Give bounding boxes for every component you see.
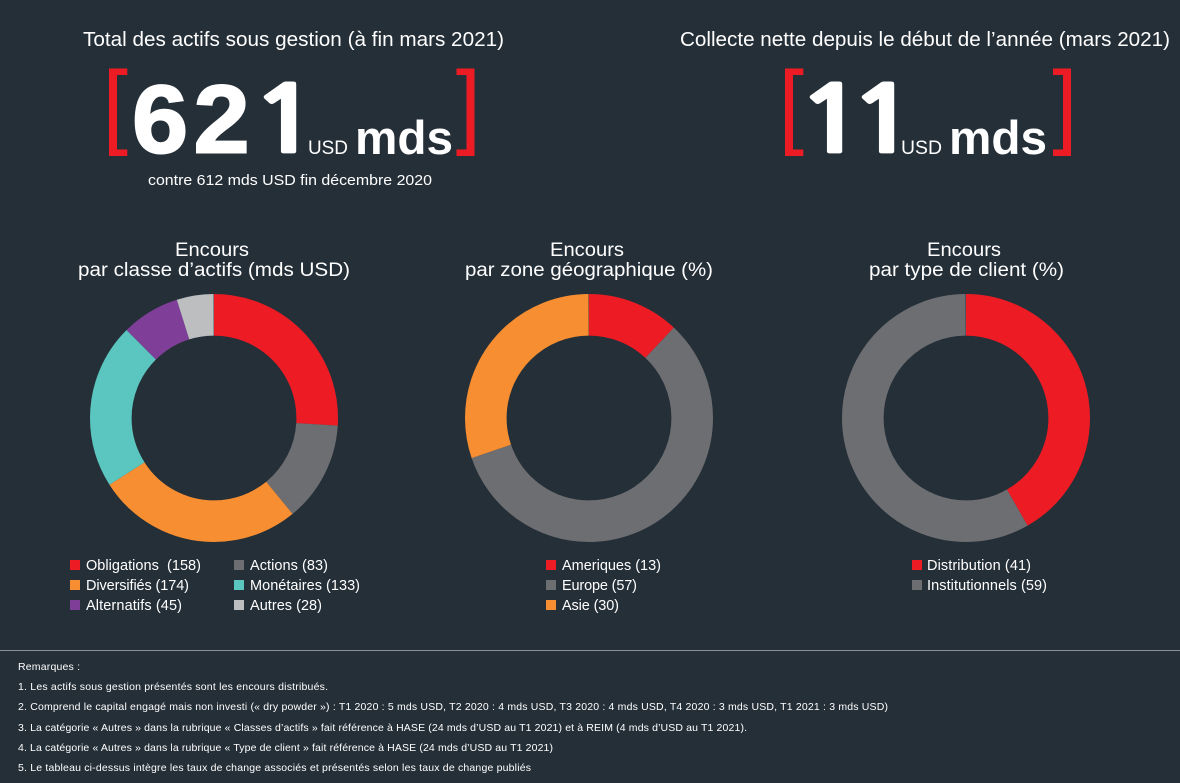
heading: by client type: [869, 240, 1064, 281]
footnotes: Remarques :: [18, 661, 80, 673]
legend: asset class: [70, 558, 360, 614]
legend: asset class: Monétaires (133): [250, 578, 360, 594]
panel: net inflows: [680, 29, 1170, 166]
legend: asset class: Actions (83): [250, 558, 328, 574]
legend: asset class: Alternatifs (45): [86, 598, 182, 614]
panel: total assets under management: [83, 29, 504, 189]
figure: 11 USD mds in red brackets: 11: [796, 75, 920, 166]
legend: client type: [912, 558, 1047, 594]
heading: by client type: par type de client (%): [869, 260, 1064, 281]
heading: by region: [465, 240, 713, 281]
comparison text: contre 612 mds USD fin décembre 2020: [148, 173, 432, 189]
heading: total assets: Total des actifs sous gestion (à fin mars 2021): [83, 29, 504, 51]
heading: by client type: Encours: [927, 240, 1001, 261]
footnotes: 1. Les actifs sous gestion présentés sont les encours distribués.: [18, 681, 328, 693]
figure: 621 USD mds in red brackets: 1: [250, 75, 322, 166]
legend: region: Asie (30): [562, 598, 619, 614]
donut chart: region: [486, 315, 692, 521]
figure: 11 USD mds in red brackets: USD: [901, 138, 942, 159]
panel: assets by region: [465, 240, 713, 614]
legend: region: Europe (57): [562, 578, 637, 594]
legend: asset class: Diversifiés (174): [86, 578, 189, 594]
figure: 621 USD mds in red brackets: USD: [308, 138, 348, 159]
heading: by asset class: Encours: [175, 240, 249, 261]
panel: assets by client type: [863, 240, 1069, 594]
legend: asset class: Obligations (158): [86, 558, 201, 574]
heading: net inflows: Collecte nette depuis le début de l’année (mars 2021): [680, 29, 1170, 51]
footnotes: 4. La catégorie « Autres » dans la rubrique « Type de client » fait référence à HASE (24 mds d’USD au T1 2021): [18, 742, 553, 754]
figure: 11 USD mds in red brackets: [785, 68, 1071, 166]
donut chart: asset class: [111, 315, 317, 521]
figure: 621 USD mds in red brackets: 62: [132, 64, 250, 173]
legend: client type: Distribution (41): [927, 558, 1031, 574]
legend: region: [546, 558, 661, 614]
legend: asset class: Autres (28): [250, 598, 322, 614]
footnotes: 2. Comprend le capital engagé mais non investi (« dry powder ») : T1 2020 : 5 mds USD, T2 2020 : 4 mds USD, T3 2020 : 4 mds USD, T4 2020 : 3 mds USD, T1 2021 : 3 mds USD): [18, 701, 888, 713]
legend: region: Ameriques (13): [562, 558, 661, 574]
figure: 621 USD mds in red brackets: mds: [355, 111, 453, 164]
heading: by asset class: par classe d’actifs (mds USD): [78, 260, 350, 281]
legend: client type: Institutionnels (59): [927, 578, 1047, 594]
panel: assets by asset class: [70, 240, 360, 614]
footnotes: 3. La catégorie « Autres » dans la rubrique « Classes d’actifs » fait référence à HASE (24 mds d’USD au T1 2021) et à REIM (4 mds d’USD au T1 2021).: [18, 722, 747, 734]
footnotes: 5. Le tableau ci-dessus intègre les taux de change associés et présentés selon les taux de change publiés: [18, 762, 531, 774]
heading: by asset class: [78, 240, 350, 281]
heading: by region: Encours: [550, 240, 624, 261]
footnotes: [18, 661, 888, 774]
donut chart: client type: [863, 315, 1069, 521]
heading: by region: par zone géographique (%): [465, 260, 713, 281]
figure: 11 USD mds in red brackets: mds: [949, 111, 1047, 164]
figure: 621 USD mds in red brackets: [109, 64, 474, 173]
